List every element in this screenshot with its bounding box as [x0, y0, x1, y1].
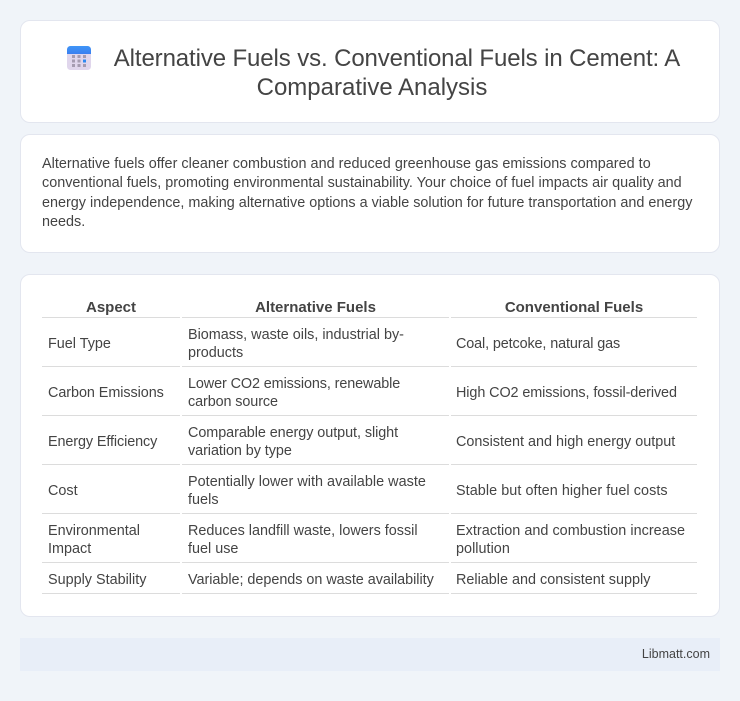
text block: introduction: Alternative fuels offer cleaner combustion and reduced greenhouse gas emissions compared to	[42, 156, 651, 172]
table: comparison: High CO2 emissions, fossil-derived	[456, 385, 677, 401]
row: environmental impact	[48, 523, 140, 557]
icon: calendar	[67, 46, 91, 70]
table: comparison: fuel use	[188, 541, 238, 557]
panel: introduction	[20, 134, 720, 253]
table: comparison: Reliable and consistent supply	[456, 572, 650, 588]
table: comparison: pollution	[456, 541, 510, 557]
table: comparison: Comparable energy output, slight	[188, 425, 398, 441]
table: comparison: Extraction and combustion increase	[456, 523, 685, 539]
text: Comparative Analysis	[257, 74, 487, 101]
header: conventional fuels: Conventional Fuels	[505, 299, 643, 316]
text block: introduction: energy independence, making alternative options a viable solution for future transportation and energy	[42, 195, 692, 211]
table: comparison: Reduces landfill waste, lowers fossil	[188, 523, 418, 539]
text block: introduction: needs.	[42, 214, 85, 230]
row: fuel type: Fuel Type	[48, 336, 111, 352]
table: comparison: carbon source	[188, 394, 278, 410]
table: comparison: products	[188, 345, 243, 361]
table: comparison: Coal, petcoke, natural gas	[456, 336, 620, 352]
footer bar	[20, 638, 720, 671]
title	[114, 45, 680, 101]
row: environmental impact: Impact	[48, 541, 91, 557]
table: comparison: Stable but often higher fuel costs	[456, 483, 668, 499]
table: comparison: variation by type	[188, 443, 292, 459]
text block: introduction	[42, 156, 692, 230]
panel: header	[20, 20, 720, 123]
text: Alternative Fuels vs. Conventional Fuels in Cement: A	[114, 45, 680, 72]
table: comparison: fuels	[188, 492, 219, 508]
row: supply stability: Supply Stability	[48, 572, 146, 588]
header: aspect: Aspect	[86, 299, 136, 316]
text block: introduction: conventional fuels, promoting environmental sustainability. Your choice of fuel impacts air quality and	[42, 175, 682, 191]
row: environmental impact: Environmental	[48, 523, 140, 539]
footer text: Libmatt.com	[642, 647, 710, 661]
table: comparison: Lower CO2 emissions, renewable	[188, 376, 400, 392]
header: alternative fuels: Alternative Fuels	[255, 299, 376, 316]
row: cost: Cost	[48, 483, 78, 499]
table: comparison: Variable; depends on waste availability	[188, 572, 434, 588]
table: comparison: Consistent and high energy output	[456, 434, 675, 450]
table: comparison: Biomass, waste oils, industrial by-	[188, 327, 404, 343]
row: carbon emissions: Carbon Emissions	[48, 385, 164, 401]
table: comparison	[42, 299, 697, 594]
table: comparison: Potentially lower with available waste	[188, 474, 426, 490]
panel: comparison table	[20, 274, 720, 617]
row: energy efficiency: Energy Efficiency	[48, 434, 157, 450]
